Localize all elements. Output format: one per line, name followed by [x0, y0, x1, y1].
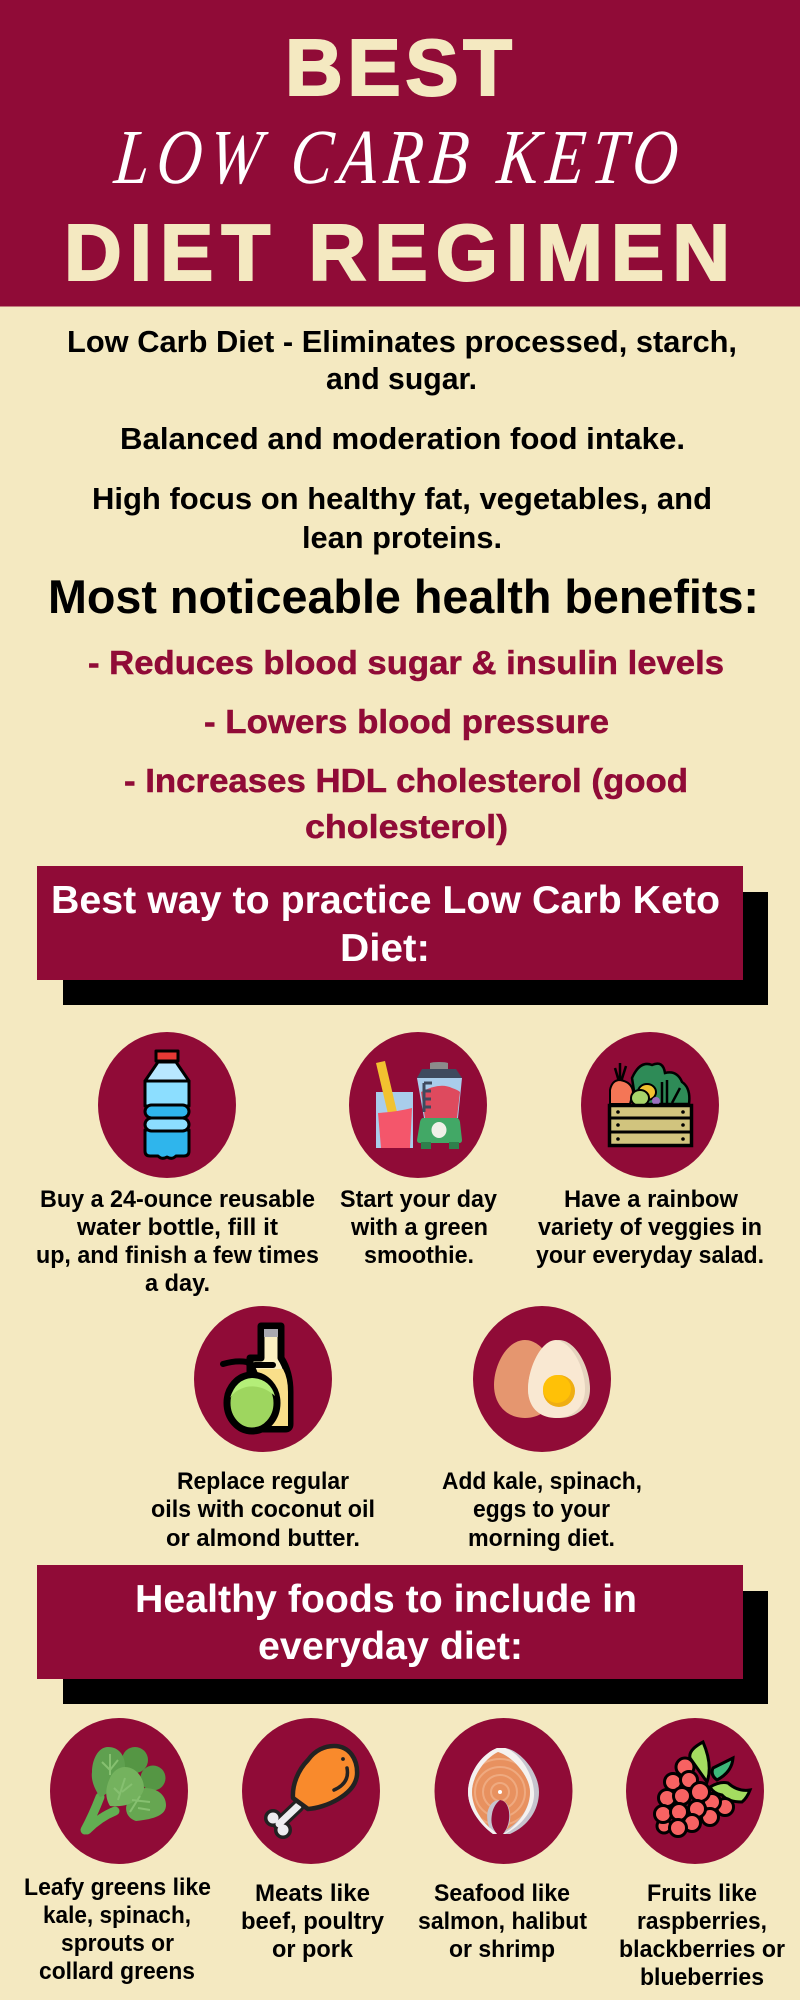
panel: best way heading: Diet:: [340, 927, 430, 970]
item: water bottle: [36, 1032, 319, 1297]
item: leafy greens: [24, 1718, 211, 1985]
item: coconut oil: or almond butter.: [166, 1525, 360, 1552]
item: meats: beef, poultry: [241, 1908, 385, 1935]
item: coconut oil: Replace regular: [177, 1468, 349, 1495]
title: BEST: BEST: [285, 23, 512, 112]
item: fruits: raspberries,: [637, 1908, 767, 1935]
panel: best way heading: [37, 866, 768, 1005]
item: rainbow veggies: variety of veggies in: [538, 1214, 762, 1241]
icon: smoothie and blender: [376, 1061, 462, 1149]
item: seafood: or shrimp: [449, 1936, 555, 1963]
icon: oil bottle and coconut: [223, 1326, 290, 1431]
benefits list: - Reduces blood sugar & insulin levels: [88, 644, 724, 681]
intro text: and sugar.: [326, 361, 477, 396]
item: coconut oil: [151, 1306, 375, 1552]
intro text: High focus on healthy fat, vegetables, and: [92, 481, 712, 516]
item: green smoothie: with a green: [350, 1214, 488, 1241]
panel: best way heading: Best way to practice Low Carb Keto: [51, 879, 720, 922]
item: seafood: salmon, halibut: [418, 1908, 587, 1935]
item: fruits: Fruits like: [647, 1880, 757, 1907]
item: meats: [241, 1718, 385, 1963]
item: rainbow veggies: Have a rainbow: [564, 1186, 738, 1213]
item: leafy greens: collard greens: [39, 1958, 195, 1985]
item: eggs: morning diet.: [468, 1525, 615, 1552]
item: water bottle: water bottle, fill it: [76, 1214, 278, 1241]
item: seafood: [418, 1718, 587, 1963]
benefits list: - Increases HDL cholesterol (good: [124, 762, 688, 799]
benefits list: [88, 644, 724, 845]
item: eggs: [442, 1306, 642, 1552]
item: fruits: blackberries or: [619, 1936, 785, 1963]
benefits list: cholesterol): [305, 808, 508, 845]
item: water bottle: Buy a 24-ounce reusable: [40, 1186, 315, 1213]
item: leafy greens: kale, spinach,: [43, 1902, 191, 1929]
item: rainbow veggies: your everyday salad.: [536, 1242, 764, 1269]
item: leafy greens: Leafy greens like: [24, 1874, 211, 1901]
icon: eggs: [494, 1340, 590, 1418]
item: fruits: blueberries: [640, 1964, 764, 1991]
item: green smoothie: Start your day: [340, 1186, 498, 1213]
item: leafy greens: sprouts or: [61, 1930, 174, 1957]
item: seafood: Seafood like: [434, 1880, 570, 1907]
icon: salmon steak: [467, 1748, 539, 1834]
intro text: Low Carb Diet - Eliminates processed, starch,: [67, 324, 737, 359]
item: water bottle: up, and finish a few times: [36, 1242, 319, 1269]
intro text: lean proteins.: [302, 520, 502, 555]
panel: healthy foods heading: [37, 1565, 768, 1704]
item: rainbow veggies: [536, 1032, 764, 1269]
panel: healthy foods heading: everyday diet:: [258, 1625, 523, 1668]
item: coconut oil: oils with coconut oil: [151, 1496, 375, 1523]
item: green smoothie: [340, 1032, 498, 1269]
title: LOW CARB KETO: LOW CARB KETO: [110, 115, 682, 201]
icon: water bottle: [145, 1051, 189, 1158]
item: eggs: Add kale, spinach,: [442, 1468, 642, 1495]
panel: healthy foods heading: Healthy foods to include in: [135, 1578, 637, 1621]
intro text: [67, 324, 737, 555]
benefits list: - Lowers blood pressure: [204, 703, 609, 740]
item: fruits: [619, 1718, 785, 1991]
title: DIET REGIMEN: DIET REGIMEN: [64, 208, 730, 297]
item: water bottle: a day.: [145, 1270, 210, 1297]
item: meats: or pork: [272, 1936, 354, 1963]
icon: spinach: [85, 1747, 166, 1830]
icon: drumstick: [264, 1746, 357, 1839]
icon: veggie crate: [610, 1063, 692, 1146]
header banner: [0, 0, 800, 306]
item: meats: Meats like: [255, 1880, 370, 1907]
icon: raspberry: [654, 1742, 750, 1836]
item: eggs: eggs to your: [473, 1496, 610, 1523]
item: green smoothie: smoothie.: [364, 1242, 474, 1269]
heading: most noticeable health benefits: Most noticeable health benefits:: [48, 570, 759, 623]
intro text: Balanced and moderation food intake.: [120, 421, 685, 456]
